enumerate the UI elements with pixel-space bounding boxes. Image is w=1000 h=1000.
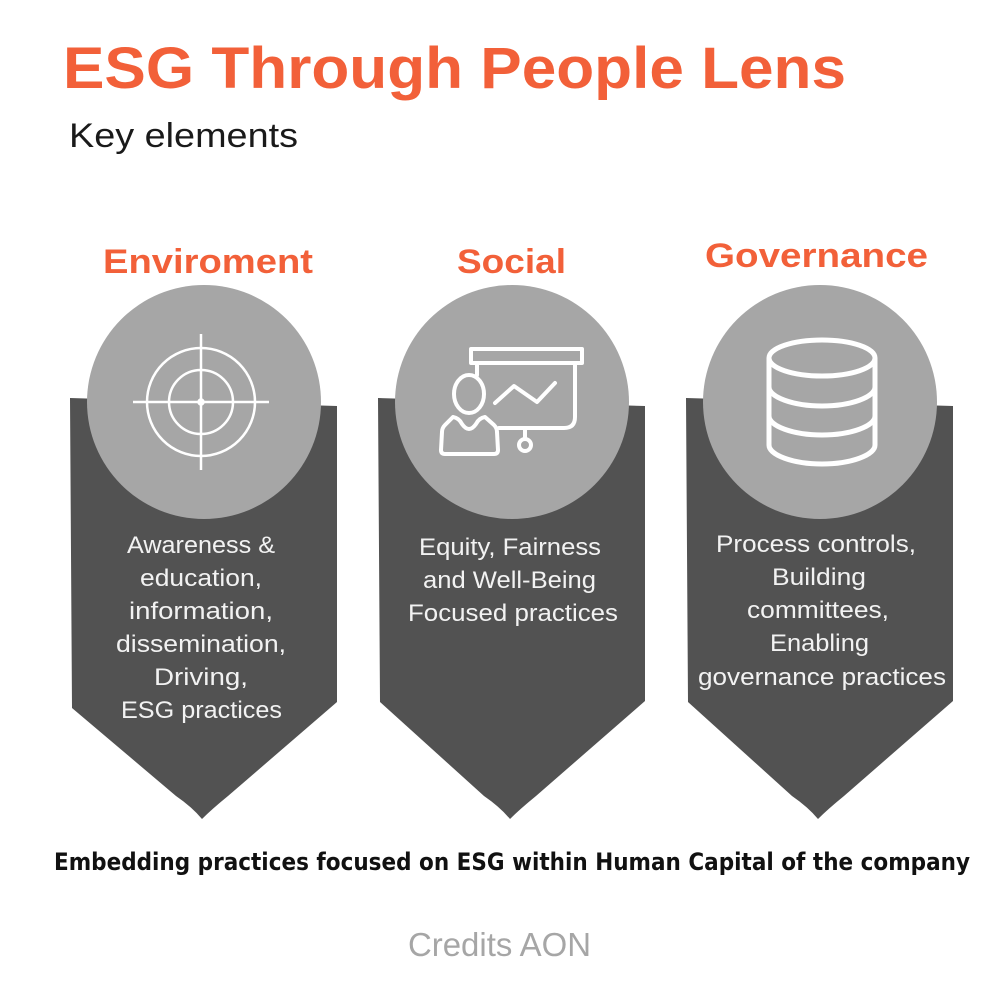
icon: presentation bbox=[441, 349, 582, 454]
text: social: Equity, Fairness bbox=[419, 534, 601, 561]
text: governance: governance practices bbox=[698, 664, 946, 691]
text: environment: information, bbox=[129, 598, 273, 625]
arrow shape: governance bbox=[686, 398, 953, 819]
panel: environment bbox=[70, 243, 337, 819]
text: governance: Building bbox=[772, 564, 866, 591]
panel: governance bbox=[686, 237, 953, 819]
text: environment: dissemination, bbox=[116, 631, 286, 658]
heading: environment: Enviroment bbox=[103, 243, 313, 281]
icon: target bbox=[133, 334, 269, 470]
text: governance bbox=[698, 531, 946, 691]
title: ESG Through People Lens bbox=[63, 36, 846, 101]
text: environment bbox=[116, 532, 286, 724]
text: environment: Awareness & bbox=[127, 532, 275, 559]
arrow shape: environment bbox=[70, 398, 337, 819]
text: environment: education, bbox=[140, 565, 262, 592]
circle: governance bbox=[703, 285, 937, 519]
arrow shape: social bbox=[378, 398, 645, 819]
text: governance: Enabling bbox=[770, 630, 869, 657]
subtitle: Key elements bbox=[69, 117, 298, 155]
text: social: and Well-Being bbox=[423, 567, 596, 594]
text: social: Focused practices bbox=[408, 600, 618, 627]
credits: Credits AON bbox=[408, 926, 591, 963]
text: governance: Process controls, bbox=[716, 531, 916, 558]
text: environment: Driving, bbox=[154, 664, 248, 691]
text: social bbox=[408, 534, 618, 627]
text: governance: committees, bbox=[747, 597, 889, 624]
heading: governance: Governance bbox=[705, 237, 928, 275]
circle: environment bbox=[87, 285, 321, 519]
panel: social bbox=[378, 243, 645, 819]
heading: social: Social bbox=[457, 243, 566, 281]
text: environment: ESG practices bbox=[121, 697, 282, 724]
circle: social bbox=[395, 285, 629, 519]
icon: database bbox=[769, 340, 875, 464]
